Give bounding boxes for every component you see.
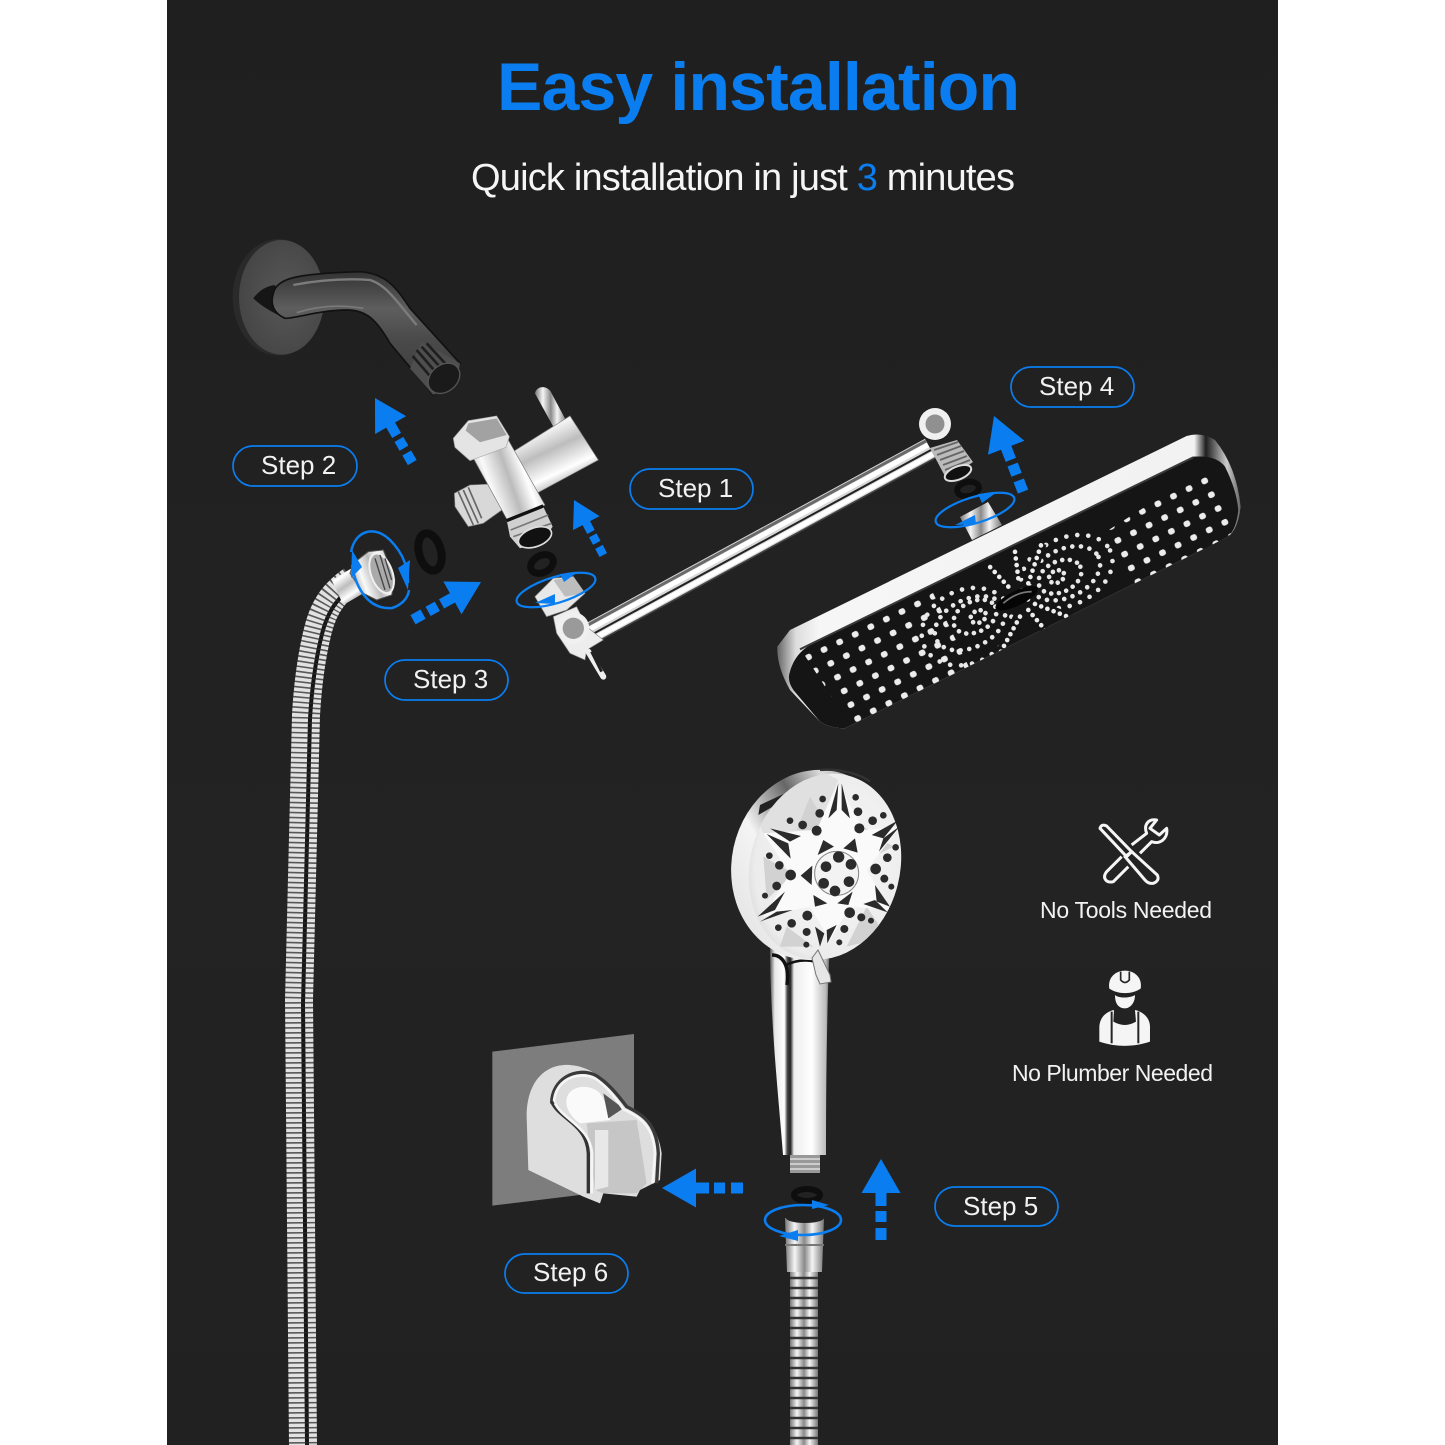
washer: step 1 bbox=[527, 551, 557, 577]
rain shower neck bbox=[960, 502, 1002, 540]
label: step 2 bbox=[233, 446, 357, 486]
rotation arrows: step 1 bbox=[513, 566, 599, 614]
label: step 1: Step 1 bbox=[658, 473, 733, 503]
arrow: step 3 bbox=[404, 566, 490, 636]
upper swivel joint bbox=[919, 408, 973, 484]
hand shower handle bbox=[770, 940, 830, 1173]
washer: step 5 bbox=[794, 1189, 820, 1201]
hand shower lever bbox=[812, 950, 831, 984]
T-valve diverter bbox=[453, 387, 598, 552]
arrow: step 1 bbox=[561, 493, 617, 562]
arrow: step 4 bbox=[976, 409, 1041, 499]
label: step 1 bbox=[630, 469, 753, 509]
arrow: step 5 bbox=[862, 1159, 900, 1240]
label: step 4: Step 4 bbox=[1039, 371, 1114, 401]
label: step 5 bbox=[935, 1187, 1058, 1226]
washer: step 3 bbox=[414, 531, 446, 573]
label: step 3 bbox=[385, 660, 508, 700]
spray nozzles bbox=[803, 470, 1243, 730]
label: step 6: Step 6 bbox=[533, 1257, 608, 1287]
label: step 3: Step 3 bbox=[413, 664, 488, 694]
background panel bbox=[167, 0, 1278, 1445]
rotation arrows: step 5 bbox=[765, 1200, 841, 1241]
label: step 5: Step 5 bbox=[963, 1191, 1038, 1221]
caption: no tools: No Tools Needed bbox=[1040, 897, 1212, 923]
label: step 6 bbox=[505, 1254, 628, 1293]
lower swivel joint bbox=[535, 577, 603, 677]
rotation arrows: step 4 bbox=[932, 486, 1018, 534]
icon: wrench and screwdriver bbox=[1100, 820, 1167, 883]
hose nut bbox=[332, 550, 399, 605]
adjustable extension arm bbox=[586, 441, 935, 643]
hand shower head bbox=[731, 768, 902, 960]
arrow: step 2 bbox=[359, 389, 428, 472]
adhesive holder bbox=[492, 1034, 662, 1206]
arrow: step 6 bbox=[662, 1168, 743, 1208]
caption: no plumber: No Plumber Needed bbox=[1012, 1060, 1213, 1086]
label: step 4 bbox=[1011, 367, 1134, 407]
icon: plumber bbox=[1099, 971, 1150, 1046]
washer: step 4 bbox=[956, 480, 980, 498]
shower arm on wall bbox=[233, 239, 466, 400]
subtitle: Quick installation in just 3 minutes bbox=[471, 157, 1015, 199]
title: Easy installation bbox=[497, 49, 1020, 125]
rain shower head bbox=[777, 435, 1243, 730]
hose bbox=[299, 580, 355, 1445]
rotation arrows: step 3 bbox=[351, 531, 410, 608]
label: step 2: Step 2 bbox=[261, 450, 336, 480]
shower hose connector bbox=[785, 1213, 824, 1445]
